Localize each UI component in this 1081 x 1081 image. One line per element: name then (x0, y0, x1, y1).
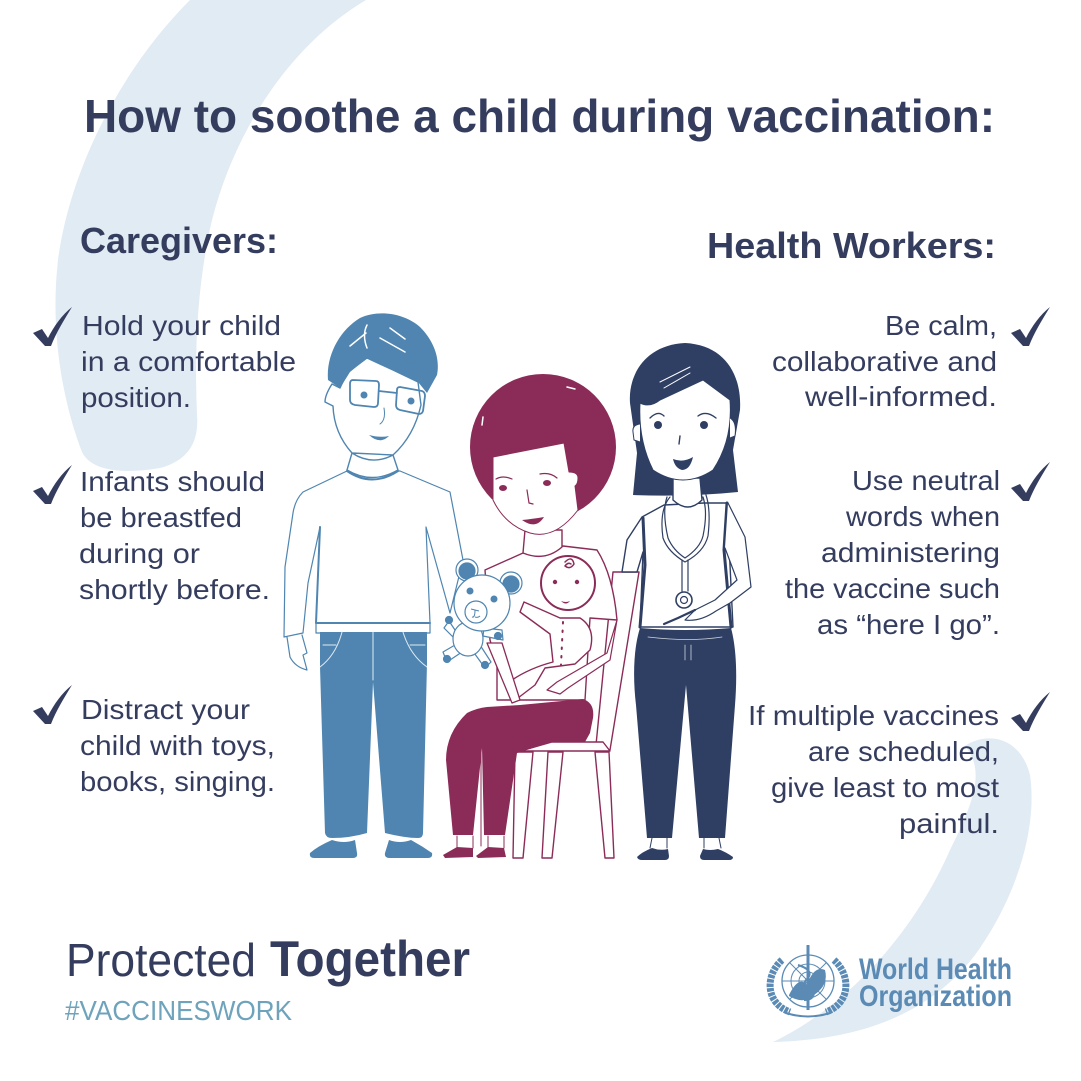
text block: multiple vaccines: If multiple vaccines (748, 700, 999, 731)
baby buttons (561, 622, 563, 665)
WHO wordmark (859, 953, 1012, 1013)
father neck and head (325, 358, 421, 478)
text block: be calm: well-informed. (804, 381, 997, 412)
worker ankles (650, 838, 721, 848)
text block: infants should be breastfed (79, 466, 270, 605)
text block: multiple vaccines: give least to most (771, 772, 999, 803)
icon: check right 2 (1011, 462, 1050, 501)
mother hair (470, 374, 616, 520)
icon: check left 3 (33, 685, 72, 724)
teddy ears (456, 559, 522, 594)
father jeans (320, 632, 427, 838)
worker face details (650, 367, 716, 470)
teddy head (454, 575, 510, 631)
chair legs (513, 752, 614, 858)
text block: use neutral words: the vaccine such (785, 573, 1000, 604)
father glasses (350, 380, 425, 414)
text block: use neutral words: Use neutral (852, 465, 1000, 496)
hashtag: #VACCINESWORK (65, 995, 292, 1026)
icon: check right 3 (1011, 692, 1050, 731)
text block: distract your child (80, 694, 275, 797)
text block: infants should be breastfed: Infants should (80, 466, 265, 497)
syringe (664, 610, 695, 624)
text block: multiple vaccines (748, 700, 999, 839)
worker ears (633, 418, 735, 442)
mother trousers (446, 699, 593, 835)
illustration: mother (443, 374, 617, 858)
text block: use neutral words: words when (845, 501, 1000, 532)
footer slogan: Together (270, 931, 470, 987)
footer slogan: Protected (66, 934, 256, 986)
baby face (553, 559, 579, 604)
text block: hold your child: position. (81, 382, 191, 413)
footer slogan (66, 931, 470, 987)
worker hair (630, 343, 740, 496)
chair back (596, 572, 639, 750)
icon: check left 1 (33, 307, 72, 346)
mother socks (457, 836, 504, 848)
text block: infants should be breastfed: be breastfed (80, 502, 242, 533)
teddy body (453, 622, 483, 656)
illustration: teddy bear (443, 559, 522, 668)
father shoes (310, 840, 432, 858)
worker right arm (685, 503, 751, 620)
trouser details (648, 637, 722, 660)
text block: distract your child: Distract your (81, 694, 250, 725)
mother arm holding teddy (487, 643, 520, 703)
text block: be calm: collaborative and (772, 346, 997, 377)
text block: hold your child: Hold your child (82, 310, 281, 341)
father sweater hem (316, 471, 430, 623)
teddy face (466, 588, 498, 617)
text block: use neutral words: administering (821, 537, 1000, 568)
background swoosh: bottom right (773, 738, 1032, 1042)
mother forearm (547, 620, 617, 694)
mother torso (485, 546, 617, 700)
text block: hold your child: in a comfortable (81, 346, 296, 377)
teddy limbs (443, 621, 503, 668)
father hand (287, 635, 307, 670)
father hair (328, 313, 438, 393)
text block: use neutral words: as “here I go”. (817, 609, 1000, 640)
heading: health workers: Health Workers: (707, 225, 996, 266)
illustration: chair (513, 572, 639, 858)
worker trousers (634, 628, 736, 838)
text block: hold your child (81, 310, 296, 413)
worker torso side shading (640, 503, 731, 627)
baby body (512, 602, 592, 698)
baby head (541, 556, 595, 610)
WHO wordmark: Organization (859, 980, 1012, 1013)
mother rear leg line (480, 750, 482, 846)
mother face details (482, 387, 575, 524)
text block: distract your child: books, singing. (80, 766, 275, 797)
text block: multiple vaccines: are scheduled, (808, 736, 999, 767)
worker shoes (637, 848, 733, 860)
father pockets (320, 632, 427, 680)
text block: use neutral words (785, 465, 1000, 640)
father face details (350, 325, 414, 440)
WHO wordmark: World Health (859, 953, 1012, 986)
chair seat (517, 742, 610, 752)
WHO emblem (770, 945, 846, 1016)
text block: infants should be breastfed: during or (79, 538, 200, 569)
title: How to soothe a child during vaccination: (84, 90, 995, 142)
mother neck (523, 530, 562, 556)
worker face (640, 380, 730, 480)
background swoosh: top left (55, 0, 366, 471)
worker torso and left arm (622, 503, 733, 627)
icon: check left 2 (33, 465, 72, 504)
teddy muzzle (465, 601, 487, 623)
mother shoes (443, 847, 506, 858)
text block: distract your child: child with toys, (80, 730, 275, 761)
text block: infants should be breastfed: shortly before. (79, 574, 270, 605)
mother face (493, 443, 578, 534)
heading: caregivers: Caregivers: (80, 220, 278, 261)
text block: be calm (772, 310, 997, 412)
illustration: father (284, 313, 463, 858)
father sweater (284, 471, 463, 637)
illustration: health worker (622, 343, 751, 860)
worker neck (673, 478, 702, 507)
text block: multiple vaccines: painful. (899, 808, 999, 839)
text block: be calm: Be calm, (885, 310, 997, 341)
stethoscope (662, 495, 709, 608)
WHO logo (770, 945, 1012, 1016)
teddy paws (444, 616, 502, 668)
icon: check right 1 (1011, 307, 1050, 346)
